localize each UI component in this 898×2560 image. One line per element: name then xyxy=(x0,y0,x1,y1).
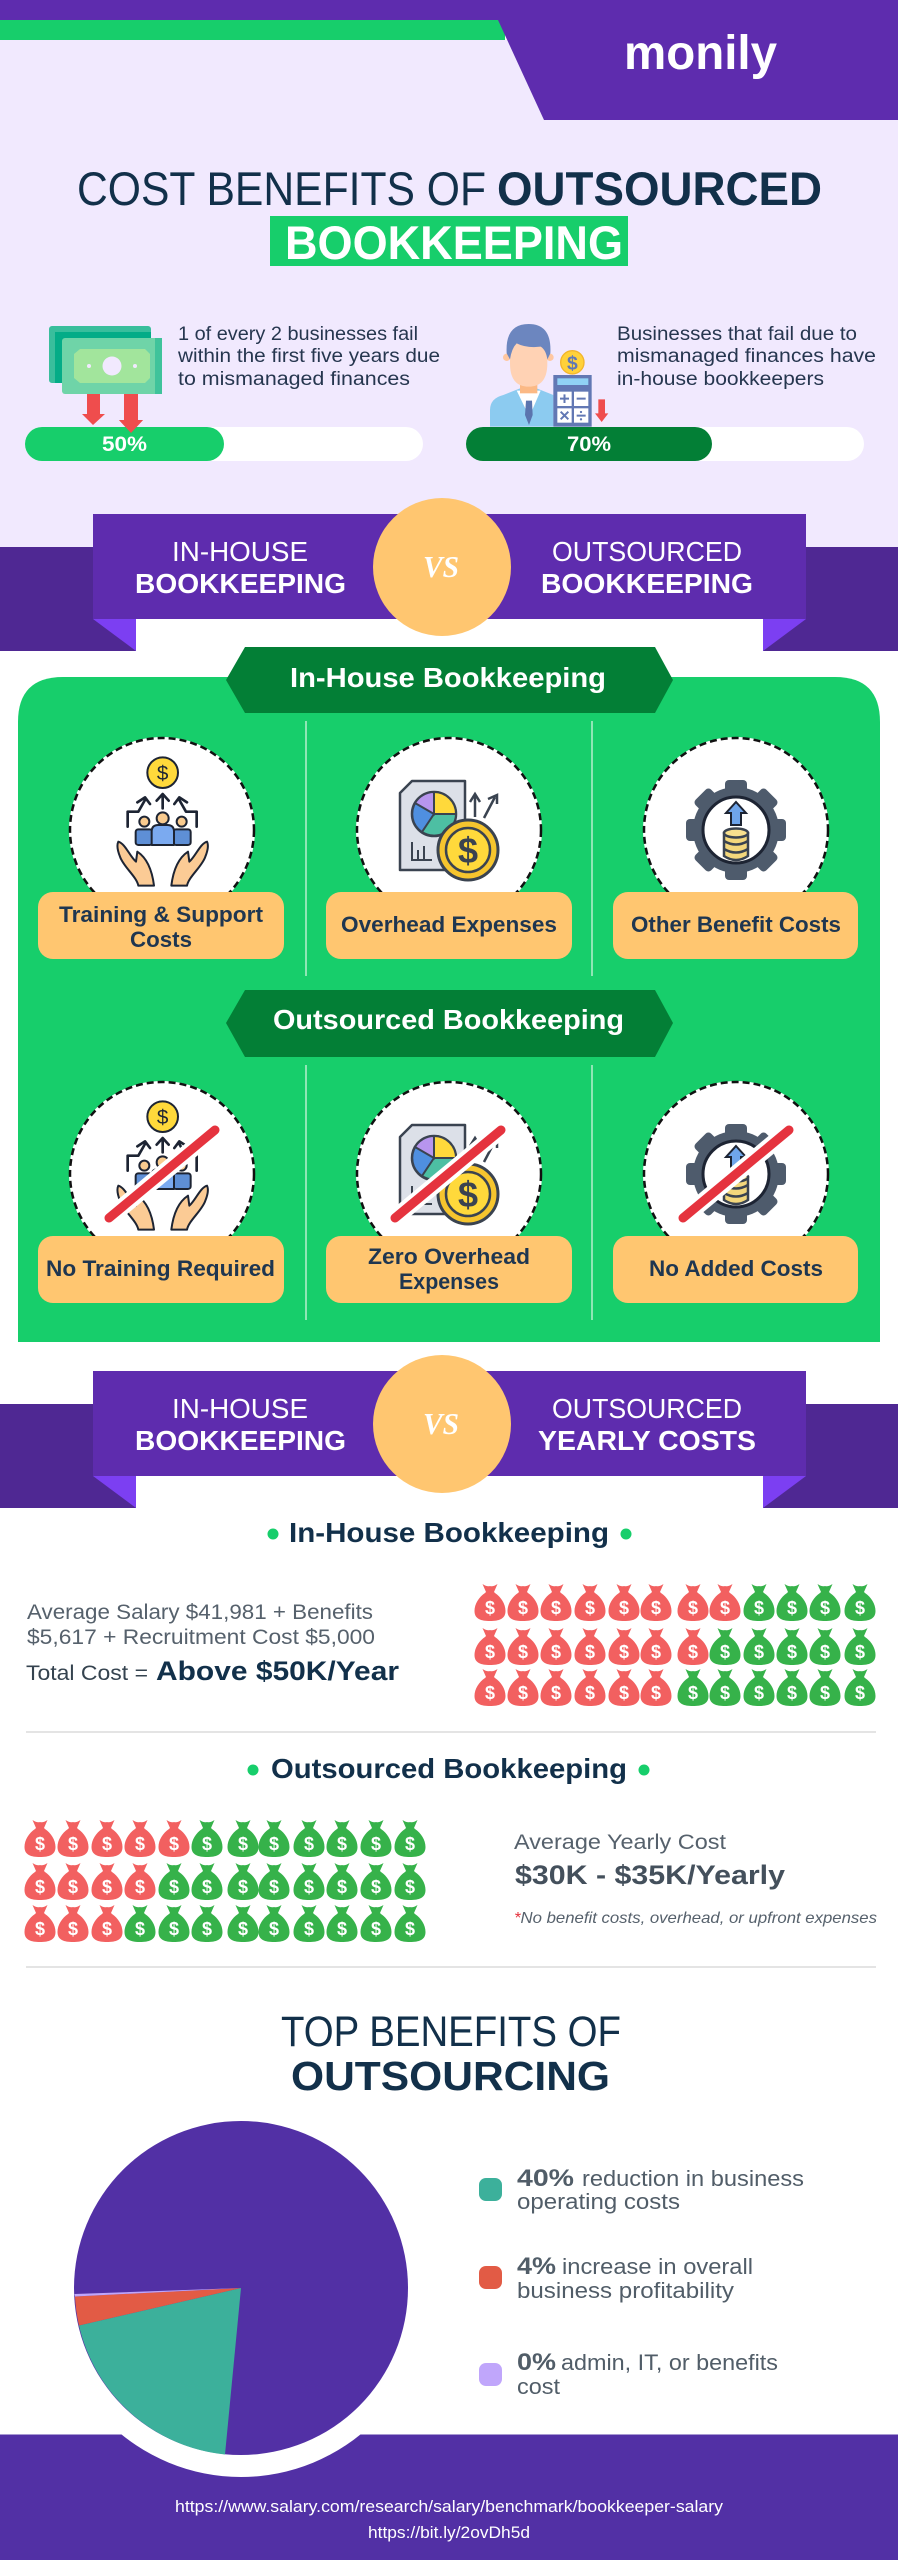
text: outsourced yearly cost xyxy=(514,1831,877,1927)
text: in-house cost breakdown: $5,617 + Recruitment Cost $5,000 xyxy=(27,1626,375,1649)
title: BOOKKEEPING xyxy=(285,216,623,269)
title xyxy=(77,162,822,269)
stat text: 1 of every 2 businesses fail xyxy=(178,324,418,345)
logo: monily: monily xyxy=(624,27,777,80)
legend: 40% reduction: reduction in business xyxy=(582,2166,804,2191)
card: Other Benefit Costs xyxy=(613,737,858,959)
text: in-house cost breakdown: Total Cost = xyxy=(26,1662,148,1685)
text: in-house cost breakdown: Average Salary $41,981 + Benefits xyxy=(27,1601,373,1624)
card: Zero Overhead Expenses xyxy=(326,1081,572,1303)
stat: 70% have in-house bookkeepers xyxy=(466,324,876,461)
legend: 0% admin: 0% xyxy=(517,2349,556,2376)
heading: In-House Bookkeeping xyxy=(226,647,673,713)
title: OUTSOURCED xyxy=(497,162,822,215)
card: No Added Costs: No Added Costs xyxy=(649,1256,823,1281)
title: COST BENEFITS OF xyxy=(77,162,486,215)
stat text: to mismanaged finances xyxy=(178,369,410,390)
progress bar: 70% xyxy=(466,427,864,461)
text: outsourced yearly cost: $30K - $35K/Yearly xyxy=(515,1860,785,1890)
card: Zero Overhead Expenses: Zero Overhead xyxy=(368,1244,530,1269)
card: Overhead Expenses xyxy=(326,737,572,959)
banner: in-house vs outsourced bookkeeping: IN-HOUSE xyxy=(172,536,308,567)
card: Training & Support Costs: Costs xyxy=(130,927,192,952)
card: Other Benefit Costs: Other Benefit Costs xyxy=(631,912,841,937)
banner: in-house vs outsourced yearly costs: IN-HOUSE xyxy=(172,1393,308,1424)
top header band xyxy=(0,0,898,120)
banner: in-house vs outsourced bookkeeping: BOOKKEEPING xyxy=(541,568,753,599)
legend: 40% reduction: 40% xyxy=(517,2165,574,2192)
footer sources xyxy=(175,2497,724,2542)
text: outsourced yearly cost: *No benefit costs, overhead, or upfront expenses xyxy=(514,1910,877,1927)
banner: in-house vs outsourced bookkeeping: BOOKKEEPING xyxy=(135,568,346,599)
banner: in-house vs outsourced yearly costs xyxy=(0,1355,898,1508)
legend: 4% increase: 4% xyxy=(517,2253,556,2280)
text: in-house cost breakdown xyxy=(26,1601,400,1686)
banner: in-house vs outsourced yearly costs: YEARLY COSTS xyxy=(538,1425,756,1456)
banner: in-house vs outsourced yearly costs: OUTSOURCED xyxy=(552,1393,742,1424)
card: No Training Required xyxy=(38,1081,284,1303)
banner: in-house vs outsourced bookkeeping xyxy=(0,498,898,651)
legend: 40% reduction xyxy=(479,2165,804,2214)
stat text: Businesses that fail due to xyxy=(617,324,857,345)
stat: 50% of businesses fail xyxy=(25,324,440,461)
footer band xyxy=(0,2434,898,2560)
heading: Outsourced Bookkeeping costs: Outsourced Bookkeeping xyxy=(271,1753,627,1784)
stat text xyxy=(177,324,440,390)
legend: 0% admin xyxy=(479,2349,778,2399)
heading: Top Benefits of Outsourcing: OUTSOURCING xyxy=(291,2053,610,2099)
card: Training & Support Costs: Training & Support xyxy=(59,902,264,927)
banner: in-house vs outsourced yearly costs: BOOKKEEPING xyxy=(135,1425,346,1456)
heading: Top Benefits of Outsourcing: TOP BENEFITS OF xyxy=(281,2008,621,2056)
icon: accountant with calculator xyxy=(490,324,608,427)
header section background xyxy=(0,40,898,547)
footer sources: https://bit.ly/2ovDh5d xyxy=(368,2523,530,2542)
text: outsourced yearly cost: Average Yearly Cost xyxy=(514,1831,726,1854)
card: No Added Costs xyxy=(613,1081,858,1303)
card: Training & Support Costs xyxy=(38,737,284,959)
progress bar: 50%: 50% xyxy=(102,433,147,456)
legend: 4% increase xyxy=(479,2253,753,2303)
footer sources: https://www.salary.com/research/salary/benchmark/bookkeeper-salary xyxy=(175,2497,724,2516)
banner: in-house vs outsourced bookkeeping: VS xyxy=(423,549,459,584)
stat text xyxy=(617,324,876,390)
stat text: within the first five years due xyxy=(177,346,440,367)
pictogram: outsourced money bags xyxy=(24,1820,426,1942)
icon: accountant with calculator: $ xyxy=(567,353,578,374)
heading: In-House Bookkeeping costs: In-House Bookkeeping xyxy=(289,1517,609,1548)
banner: in-house vs outsourced yearly costs: VS xyxy=(423,1406,459,1441)
stat text: in-house bookkeepers xyxy=(617,369,824,390)
heading: Outsourced Bookkeeping: Outsourced Bookkeeping xyxy=(273,1004,624,1035)
legend: 4% increase: increase in overall xyxy=(562,2254,753,2279)
pie chart xyxy=(52,2099,430,2477)
legend: 0% admin: cost xyxy=(517,2374,560,2399)
banner: in-house vs outsourced bookkeeping: OUTSOURCED xyxy=(552,536,742,567)
card: No Training Required: No Training Required xyxy=(46,1256,275,1281)
card: Overhead Expenses: Overhead Expenses xyxy=(341,912,557,937)
heading: Top Benefits of Outsourcing xyxy=(281,2008,621,2099)
stat text: mismanaged finances have xyxy=(617,346,876,367)
progress bar: 70%: 70% xyxy=(567,433,611,456)
pictogram: in-house money bags xyxy=(474,1584,876,1706)
heading: Outsourced Bookkeeping xyxy=(226,990,673,1057)
text: in-house cost breakdown: Above $50K/Year xyxy=(156,1656,400,1686)
panel: cost comparison xyxy=(18,647,880,1342)
legend: 0% admin: admin, IT, or benefits xyxy=(561,2350,778,2375)
legend: 4% increase: business profitability xyxy=(517,2278,734,2303)
heading: In-House Bookkeeping: In-House Bookkeeping xyxy=(290,662,606,693)
card: Zero Overhead Expenses: Expenses xyxy=(399,1269,499,1294)
icon: banknotes with falling arrows xyxy=(49,326,162,433)
progress bar: 50% xyxy=(25,420,423,461)
legend: 40% reduction: operating costs xyxy=(517,2189,680,2214)
